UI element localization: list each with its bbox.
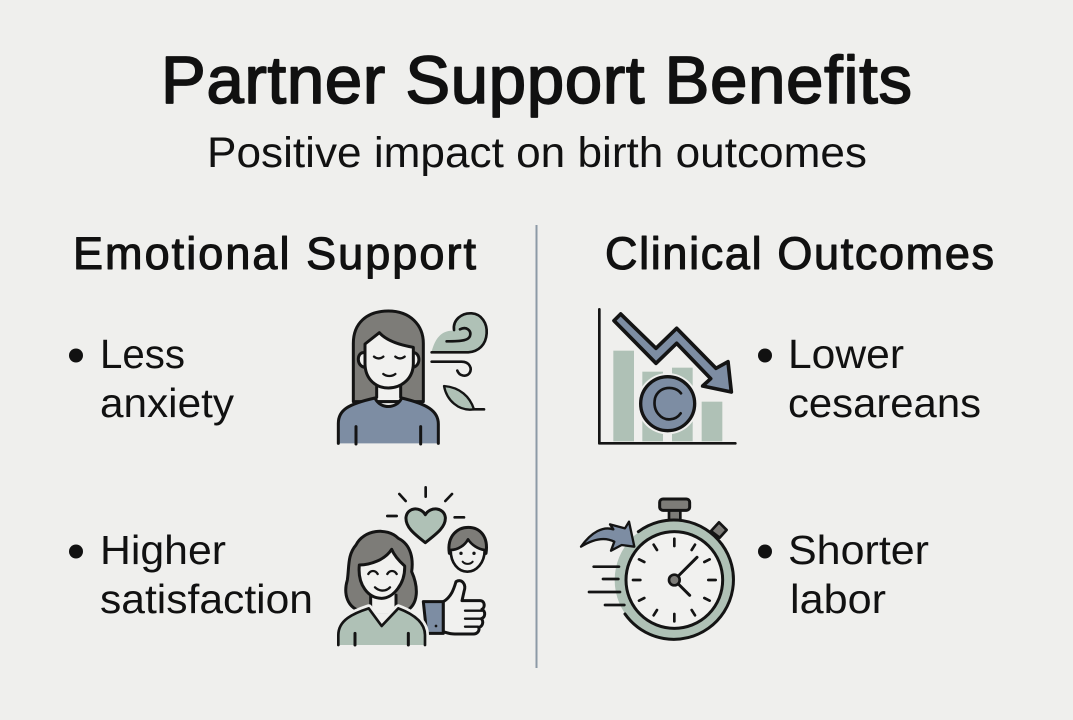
heading: emotional support: Emotional Support bbox=[73, 228, 476, 279]
title: Partner Support Benefits bbox=[161, 43, 912, 118]
icon: stopwatch with speed lines bbox=[581, 499, 734, 640]
bullet: shorter labor: Shorter bbox=[788, 527, 929, 573]
icon: calm woman with breeze and leaf bbox=[338, 311, 487, 444]
bullet: lower cesareans bbox=[758, 331, 981, 426]
heading: clinical outcomes: Clinical Outcomes bbox=[605, 228, 994, 279]
bullet: shorter labor bbox=[758, 527, 929, 622]
bullet: higher satisfaction bbox=[69, 527, 313, 622]
icon: smiling woman with heart, partner and thumbs up bbox=[338, 487, 486, 645]
bullet: shorter labor: labor bbox=[790, 576, 886, 622]
bullet: less anxiety: Less bbox=[100, 331, 185, 377]
bullet: less anxiety: anxiety bbox=[100, 380, 235, 426]
bullet: lower cesareans: cesareans bbox=[788, 380, 981, 426]
bullet: less anxiety bbox=[69, 331, 235, 426]
bullet: higher satisfaction: Higher bbox=[100, 527, 226, 573]
icon: declining bar chart with C coin bbox=[599, 309, 735, 443]
subtitle: Positive impact on birth outcomes bbox=[207, 129, 867, 177]
bullet: lower cesareans: Lower bbox=[788, 331, 904, 377]
bullet: higher satisfaction: satisfaction bbox=[100, 576, 313, 622]
